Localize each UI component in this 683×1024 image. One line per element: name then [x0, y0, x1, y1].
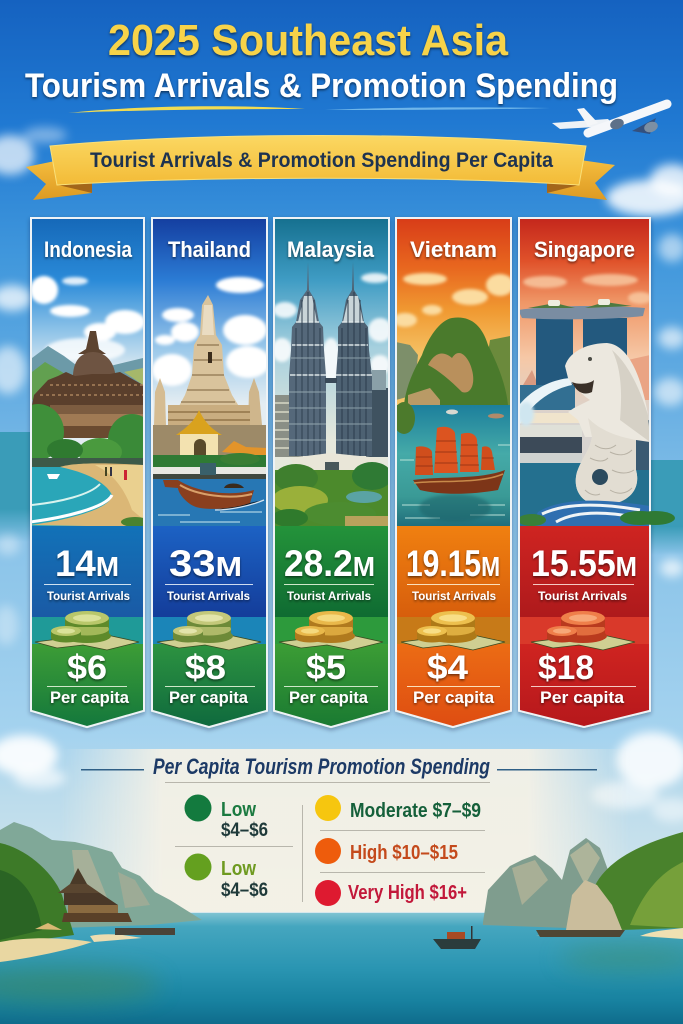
legend item: moderate: Moderate $7–$9	[350, 800, 481, 822]
arrivals value: 33M	[169, 543, 242, 584]
country name: Thailand	[168, 237, 251, 262]
legend item: high: High $10–$15	[350, 842, 458, 864]
title	[25, 16, 618, 105]
arrivals label: Tourist Arrivals	[47, 589, 130, 603]
sea	[0, 913, 683, 1024]
arrivals value: 15.55M	[531, 543, 637, 584]
arrivals value: 28.2M	[284, 543, 375, 584]
spending label: Per capita	[50, 688, 130, 707]
arrivals label: Tourist Arrivals	[538, 589, 627, 603]
panel: Indonesia	[27, 216, 148, 732]
spending label: Per capita	[540, 688, 625, 707]
legend item: very high: Very High $16+	[348, 882, 467, 904]
legend item: very high	[315, 880, 467, 906]
legend item: high	[315, 838, 458, 864]
legend item: low dark green: Low	[221, 799, 256, 821]
panel: Thailand	[152, 218, 270, 726]
country name: Vietnam	[410, 237, 497, 262]
right tower	[336, 262, 372, 456]
stats block	[520, 526, 649, 726]
title line 1: 2025 Southeast Asia	[108, 16, 508, 65]
panel: Vietnam	[393, 218, 514, 726]
stats block	[397, 526, 510, 726]
panel: Singapore	[518, 218, 675, 726]
arrivals label: Tourist Arrivals	[412, 589, 496, 603]
legend title: Per Capita Tourism Promotion Spending	[153, 754, 490, 779]
spending value: $5	[306, 649, 346, 687]
spending value: $8	[185, 649, 226, 687]
illustration: Petronas Towers	[272, 218, 392, 528]
left island	[0, 822, 202, 962]
arrivals value: 19.15M	[406, 543, 500, 584]
ribbon body	[50, 136, 586, 185]
stats block	[153, 526, 266, 726]
spending label: Per capita	[413, 688, 495, 707]
illustration: Marina Bay Sands and Merlion	[520, 219, 649, 526]
ribbon left tail	[26, 160, 92, 200]
illustration: Borobudur and beach	[32, 219, 143, 526]
bottom coastal scene	[0, 822, 683, 1024]
arrivals label: Tourist Arrivals	[167, 589, 250, 603]
stats block	[32, 526, 143, 726]
title line 2: Tourism Arrivals & Promotion Spending	[25, 67, 618, 105]
side sea strips behind columns	[0, 432, 683, 555]
legend item: low dark green	[184, 794, 268, 841]
clouds	[0, 127, 683, 822]
country name: Malaysia	[287, 237, 375, 262]
small boat	[433, 926, 481, 949]
country name: Singapore	[534, 237, 635, 262]
arrivals label: Tourist Arrivals	[287, 589, 371, 603]
legend item: moderate	[315, 795, 481, 822]
Merlion statue	[565, 343, 650, 505]
spending label: Per capita	[289, 688, 369, 707]
panel: Malaysia	[272, 218, 392, 726]
left tower	[289, 262, 326, 456]
illustration: Thai temple and longtail boat	[152, 218, 270, 528]
spending label: Per capita	[169, 688, 249, 707]
country name: Indonesia	[44, 237, 133, 262]
legend background card	[60, 749, 630, 912]
spending value: $18	[538, 649, 594, 687]
legend item: low dark green: $4–$6	[221, 820, 268, 841]
stats block	[275, 526, 388, 726]
spending value: $6	[67, 649, 107, 687]
panel: legend	[81, 754, 597, 906]
spending value: $4	[427, 649, 468, 687]
ribbon right tail	[547, 160, 615, 200]
legend item: low light green: Low	[221, 858, 256, 880]
icon: airplane	[552, 104, 667, 134]
legend item: low light green	[184, 854, 268, 901]
ribbon banner	[26, 136, 615, 200]
legend item: low light green: $4–$6	[221, 880, 268, 901]
bush overhanging column	[635, 511, 675, 525]
ribbon text: Tourist Arrivals & Promotion Spending Per Capita	[90, 149, 553, 172]
illustration: Ha Long Bay junk	[393, 218, 514, 528]
arrivals value: 14M	[55, 543, 119, 584]
pagoda	[58, 868, 132, 922]
right rocks	[483, 832, 683, 939]
